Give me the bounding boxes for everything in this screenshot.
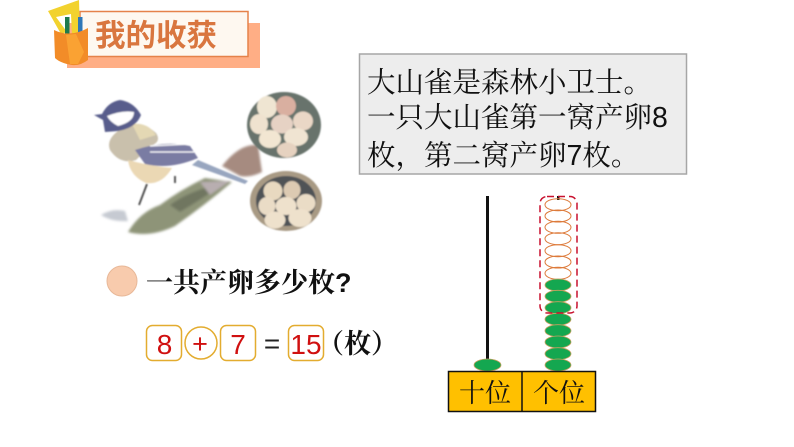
text box: problem statement: 枚，第二窝产卵7枚。 <box>367 140 639 172</box>
tail <box>192 160 248 184</box>
abacus <box>448 196 596 412</box>
text box: problem statement: 一只大山雀第一窝产卵8 <box>367 102 668 134</box>
wing <box>135 144 198 166</box>
place value boxes <box>448 372 596 412</box>
question text: 一共产卵多少枚? <box>146 268 352 298</box>
beads: ones hollow <box>545 199 571 279</box>
equation: 8 + 7 = 15 (枚): 15 <box>290 329 322 360</box>
bird body <box>109 125 158 161</box>
equation: 8 + 7 = 15 (枚): 8 <box>157 329 172 360</box>
bird head <box>94 100 141 132</box>
icon: pencil cup with ruler <box>48 0 88 65</box>
legs <box>139 176 175 205</box>
bead: tens <box>474 359 501 371</box>
text box: problem statement <box>360 54 686 174</box>
rod: tens <box>486 196 489 364</box>
rod: ones <box>557 196 560 200</box>
equation: 8 + 7 = 15 (枚): （枚） <box>317 329 398 359</box>
equation: 8 + 7 = 15 (枚): + <box>192 329 208 359</box>
text box: problem statement: 大山雀是森林小卫士。 <box>367 67 652 99</box>
abacus: 十位 <box>459 378 511 408</box>
equation: 8 + 7 = 15 (枚): 7 <box>230 329 246 360</box>
abacus: 个位 <box>533 378 585 408</box>
branch <box>101 145 262 234</box>
icon: peach circle marker <box>107 266 137 296</box>
beads: ones filled <box>545 279 571 371</box>
picture: egg nest bottom <box>250 171 322 231</box>
equation: 8 + 7 = 15 (枚): = <box>264 328 280 359</box>
picture: egg nest top <box>247 92 321 158</box>
picture: great tit on branch <box>94 100 262 234</box>
dashed group of ten <box>540 196 577 313</box>
equation: 8 + 7 = 15 (枚) <box>146 326 398 360</box>
header: 我的收获 <box>67 12 260 68</box>
heading text: 我的收获 <box>95 19 217 53</box>
